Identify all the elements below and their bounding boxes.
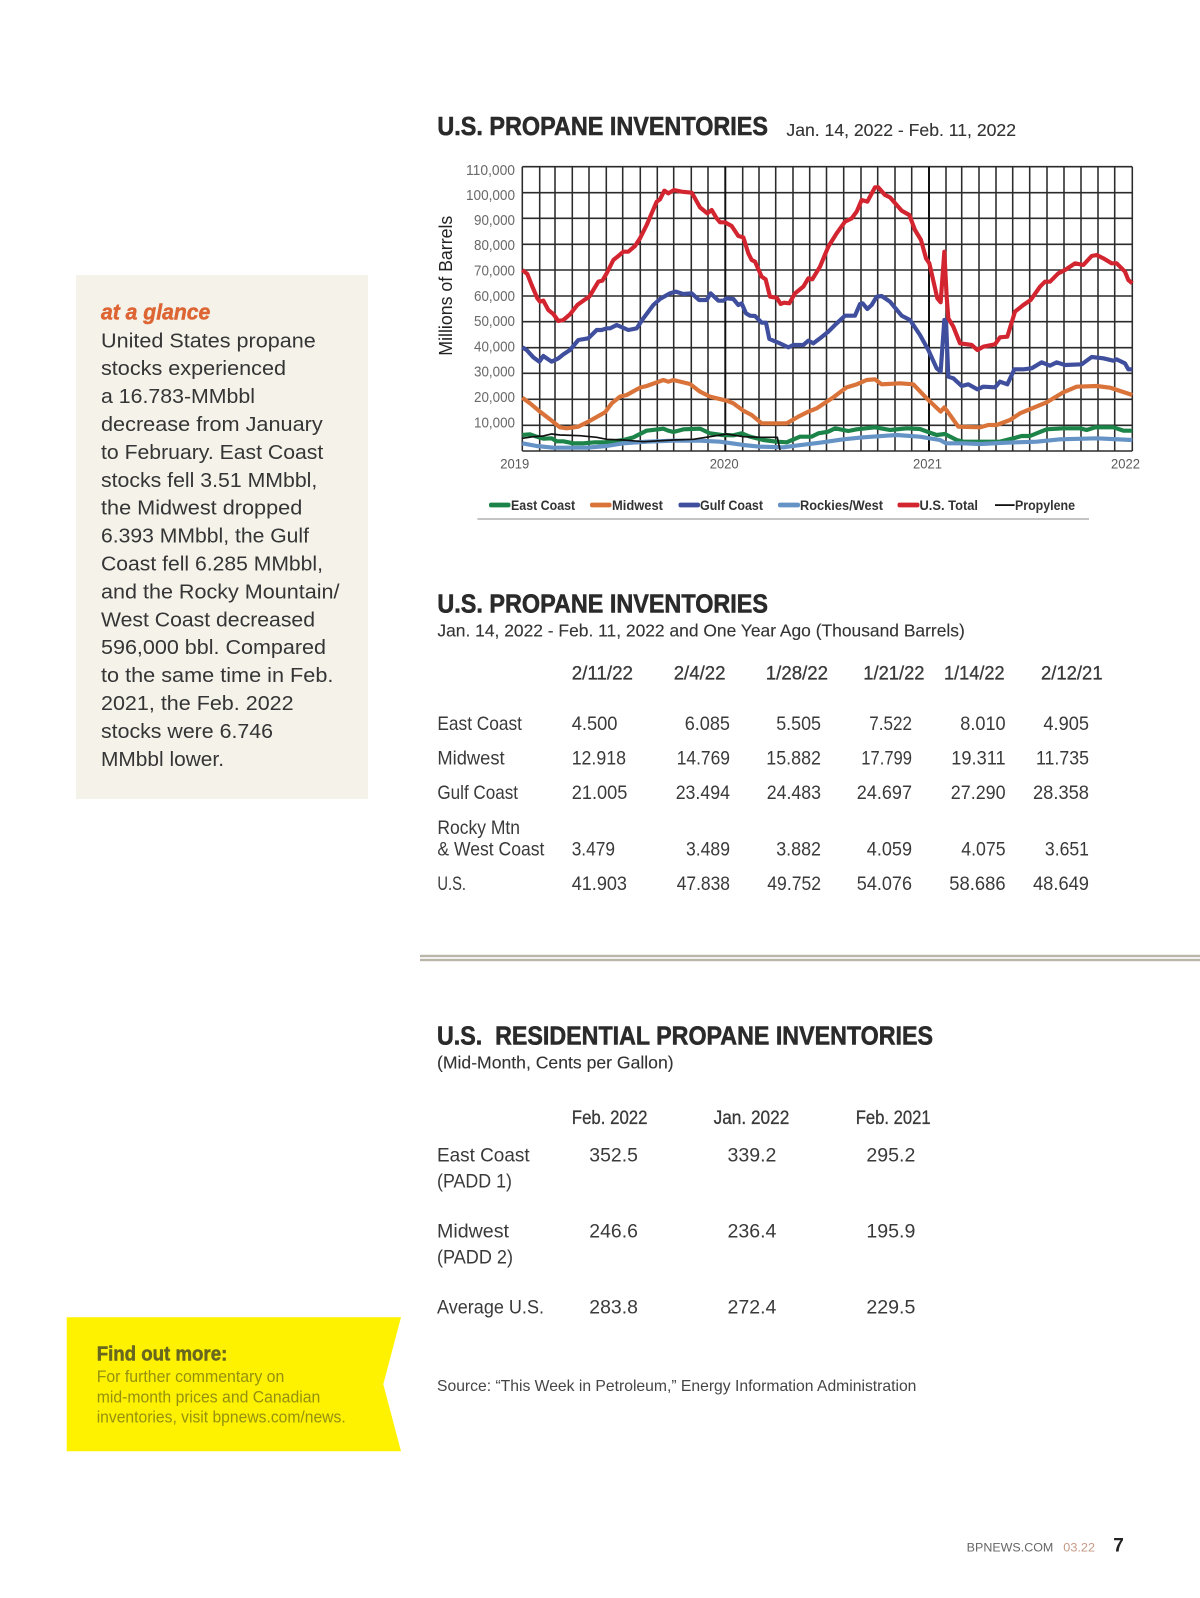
row: Rocky Mtn and West Coast: 3.651 (1045, 839, 1089, 861)
text block: at a glance summary: MMbbl lower. (101, 748, 224, 771)
row: Rocky Mtn and West Coast: 3.882 (776, 839, 821, 861)
row: Midwest: 19.311 (951, 747, 1006, 769)
text block: at a glance summary: stocks experienced (101, 357, 286, 380)
footer (967, 1536, 1124, 1556)
table header dates: 1/21/22 (863, 662, 924, 684)
line: Midwest (522, 379, 1132, 428)
row: East Coast PADD 1: 295.2 (866, 1145, 915, 1167)
x axis labels: 2019 (500, 455, 529, 471)
text block: at a glance summary: to the same time in Feb. (101, 664, 333, 687)
text block: at a glance summary: 2021, the Feb. 2022 (101, 692, 294, 715)
row: Gulf Coast: Gulf Coast (437, 782, 519, 804)
y axis labels: 90,000 (474, 212, 515, 229)
row: Rocky Mtn and West Coast: 4.075 (961, 839, 1006, 861)
row: Rocky Mtn and West Coast: 3.489 (686, 839, 730, 861)
y axis labels: 80,000 (474, 237, 515, 254)
heading: U.S. propane inventories chart (437, 113, 1016, 141)
row: East Coast PADD 1 (437, 1145, 915, 1192)
table header months: Feb. 2021 (856, 1107, 931, 1129)
y axis title: Millions of Barrels (435, 216, 456, 356)
row: East Coast: 8.010 (960, 713, 1006, 735)
y axis labels: 20,000 (474, 389, 515, 406)
row: U.S. (437, 873, 1089, 895)
table header months: Feb. 2022 (572, 1107, 648, 1129)
row: Midwest PADD 2 (437, 1221, 915, 1268)
callout: find out more: inventories, visit bpnews.com/news. (97, 1408, 346, 1426)
row: Midwest PADD 2: 236.4 (728, 1221, 777, 1243)
heading: U.S. propane inventories table: Jan. 14, 2022 - Feb. 11, 2022 and One Year Ago (Thousand Barrels) (437, 621, 965, 641)
y axis labels: 40,000 (474, 339, 515, 356)
legend: Propylene (1015, 498, 1075, 513)
y axis labels: 10,000 (474, 414, 515, 431)
row: Midwest PADD 2: (PADD 2) (437, 1246, 513, 1268)
table header months: Jan. 2022 (714, 1107, 789, 1129)
heading: U.S. propane inventories chart: U.S. PROPANE INVENTORIES (437, 113, 768, 141)
row: Gulf Coast: 28.358 (1033, 782, 1089, 804)
x axis labels: 2022 (1111, 455, 1140, 471)
line: Rockies/West (522, 435, 1132, 448)
row: Midwest: 15.882 (766, 747, 821, 769)
table header dates (572, 662, 1103, 684)
row: Gulf Coast: 27.290 (951, 782, 1006, 804)
row: Gulf Coast: 24.483 (767, 782, 821, 804)
row: U.S.: 48.649 (1033, 873, 1089, 895)
heading: at a glance: at a glance (101, 299, 210, 324)
text block: at a glance summary: and the Rocky Mountain/ (101, 580, 340, 603)
row: East Coast PADD 1: 352.5 (589, 1145, 638, 1167)
row: East Coast PADD 1: East Coast (437, 1145, 530, 1167)
row: Midwest PADD 2: 246.6 (589, 1221, 638, 1243)
legend: East Coast (511, 498, 576, 513)
legend: Rockies/West (800, 498, 883, 513)
table header dates: 2/4/22 (674, 662, 726, 684)
line: East Coast (522, 427, 1132, 443)
text block: at a glance summary: the Midwest dropped (101, 497, 302, 520)
row: East Coast: East Coast (437, 713, 523, 735)
y axis labels (466, 162, 515, 431)
row: U.S.: 58.686 (949, 873, 1006, 895)
callout: find out more: For further commentary on (97, 1368, 284, 1386)
text block: at a glance summary: Coast fell 6.285 MMbbl, (101, 552, 323, 576)
row: Midwest: 12.918 (572, 747, 626, 769)
row: Average U.S.: 283.8 (589, 1296, 638, 1318)
data lines (522, 187, 1132, 450)
row: Gulf Coast: 21.005 (572, 782, 628, 804)
footer: 7 (1113, 1536, 1124, 1556)
legend: Gulf Coast (700, 498, 763, 513)
heading: U.S. propane inventories chart: Jan. 14, 2022 - Feb. 11, 2022 (786, 120, 1016, 140)
row: Gulf Coast: 24.697 (857, 782, 912, 804)
x axis labels: 2020 (710, 455, 739, 471)
text block: at a glance summary: decrease from January (101, 413, 323, 436)
row: Midwest PADD 2: Midwest (437, 1221, 510, 1243)
table: inventories by region (437, 662, 1103, 895)
row: Midwest PADD 2: 195.9 (866, 1221, 915, 1243)
line chart: U.S. propane inventories (435, 162, 1140, 520)
row: East Coast: 6.085 (685, 713, 730, 735)
heading: U.S. residential propane inventories: U.S. RESIDENTIAL PROPANE INVENTORIES (437, 1022, 933, 1050)
callout: find out more: Find out more: (97, 1344, 227, 1366)
text block: at a glance summary: stocks fell 3.51 MMbbl, (101, 469, 317, 492)
row: Rocky Mtn and West Coast: Rocky Mtn (437, 817, 520, 839)
row: Midwest: 17.799 (861, 747, 912, 769)
row: Midwest: 14.769 (677, 747, 730, 769)
y axis labels: 110,000 (466, 162, 515, 179)
row: East Coast: 7.522 (869, 713, 912, 735)
text block: at a glance summary: West Coast decreased (101, 608, 315, 631)
row: East Coast: 4.905 (1043, 713, 1089, 735)
row: U.S.: 54.076 (857, 873, 912, 895)
x axis labels (500, 455, 1140, 471)
row: Rocky Mtn and West Coast (437, 817, 1089, 861)
table header dates: 2/12/21 (1041, 662, 1103, 684)
row: Average U.S. (437, 1296, 916, 1318)
heading: U.S. residential propane inventories: (Mid-Month, Cents per Gallon) (437, 1052, 674, 1072)
row: Average U.S.: 229.5 (866, 1296, 916, 1318)
callout: find out more (67, 1317, 401, 1451)
row: Gulf Coast: 23.494 (676, 782, 730, 804)
row: Midwest: Midwest (437, 747, 505, 769)
row: Rocky Mtn and West Coast: 4.059 (867, 839, 912, 861)
footer: BPNEWS.COM (967, 1543, 1053, 1555)
row: Midwest (437, 747, 1089, 769)
y axis labels: 30,000 (474, 364, 515, 381)
y axis labels: 70,000 (474, 263, 515, 280)
line: Propylene (522, 434, 780, 450)
row: U.S.: 49.752 (767, 873, 821, 895)
row: Gulf Coast (437, 782, 1089, 804)
legend: Midwest (612, 498, 663, 513)
row: Average U.S.: Average U.S. (437, 1296, 544, 1318)
row: East Coast PADD 1: (PADD 1) (437, 1170, 512, 1192)
row: Rocky Mtn and West Coast: 3.479 (572, 839, 615, 861)
table header dates: 1/28/22 (766, 662, 828, 684)
row: East Coast: 5.505 (776, 713, 821, 735)
y axis labels: 60,000 (474, 288, 515, 305)
text block: at a glance summary: to February. East Coast (101, 441, 324, 464)
y axis labels: 50,000 (474, 313, 515, 330)
text block: at a glance summary: a 16.783-MMbbl (101, 385, 255, 408)
row: U.S.: 47.838 (677, 873, 730, 895)
text block: at a glance summary (101, 329, 340, 771)
heading: U.S. residential propane inventories (437, 1022, 933, 1072)
row: U.S.: 41.903 (572, 873, 627, 895)
row: Rocky Mtn and West Coast: & West Coast (437, 839, 545, 861)
text block: at a glance summary: 596,000 bbl. Compared (101, 636, 326, 659)
row: Average U.S.: 272.4 (728, 1296, 777, 1318)
row: U.S.: U.S. (437, 873, 466, 895)
callout: find out more: mid-month prices and Canadian (97, 1388, 320, 1406)
heading: U.S. propane inventories table (437, 591, 965, 641)
text block: at a glance summary: stocks were 6.746 (101, 720, 273, 743)
line: Gulf Coast (522, 292, 1132, 389)
panel: at a glance (76, 275, 368, 799)
text block: at a glance summary: United States propane (101, 329, 316, 352)
y axis labels: 100,000 (466, 187, 515, 204)
row: East Coast: 4.500 (572, 713, 618, 735)
row: East Coast PADD 1: 339.2 (728, 1145, 776, 1167)
line: U.S. Total (522, 187, 1132, 350)
table header months (572, 1107, 931, 1129)
row: Midwest: 11.735 (1036, 747, 1089, 769)
table header dates: 2/11/22 (572, 662, 633, 684)
x axis labels: 2021 (913, 455, 942, 471)
table: residential prices (437, 1107, 931, 1318)
text block: at a glance summary: 6.393 MMbbl, the Gulf (101, 525, 309, 548)
table header dates: 1/14/22 (944, 662, 1005, 684)
row: East Coast (437, 713, 1089, 735)
legend (477, 498, 1089, 520)
heading: U.S. propane inventories table: U.S. PROPANE INVENTORIES (437, 591, 768, 619)
source note: Source: “This Week in Petroleum,” Energy Information Administration (437, 1378, 916, 1395)
legend: U.S. Total (920, 498, 978, 513)
footer: 03.22 (1063, 1541, 1095, 1555)
